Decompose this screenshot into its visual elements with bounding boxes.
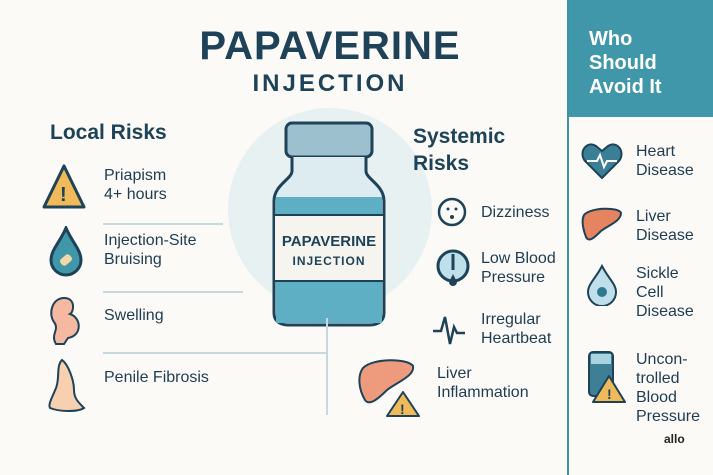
illustration: vial: INJECTION (292, 254, 366, 268)
item: irregular heartbeat: Irregular (481, 311, 541, 328)
item: bruising: Bruising (104, 251, 162, 268)
item: heart disease (582, 143, 694, 180)
item: priapism (42, 164, 167, 208)
item: penile fibrosis (48, 358, 209, 412)
illustration: vial: PAPAVERINE (282, 233, 376, 250)
item: priapism: Priapism (104, 167, 166, 184)
heading: systemic risks (413, 125, 505, 175)
item: low blood pressure: Low Blood (481, 250, 556, 267)
title (199, 24, 461, 97)
item: liver inflammation (358, 359, 529, 417)
item: uncontrolled bp: Uncon- (636, 351, 688, 368)
dividers (103, 223, 223, 225)
title: INJECTION (252, 70, 408, 97)
heading: systemic risks: Risks (413, 152, 469, 175)
panel: systemic risks (358, 125, 556, 417)
item: uncontrolled bp: trolled (636, 370, 680, 387)
item: bruising: Injection-Site (104, 232, 196, 249)
item: uncontrolled bp: Blood (636, 389, 677, 406)
item: swelling (50, 297, 164, 345)
item: liver inflammation: ! (400, 401, 405, 417)
item: heart disease: Disease (636, 162, 694, 179)
item: liver disease (582, 208, 694, 244)
item: bruising (50, 226, 196, 276)
item: dizziness (438, 198, 549, 226)
item: uncontrolled bp (588, 351, 700, 425)
item: sickle cell (587, 264, 694, 320)
illustration: vial (228, 108, 432, 326)
item: dizziness: Dizziness (481, 204, 549, 221)
item: irregular heartbeat: Heartbeat (481, 330, 551, 347)
panel: who should avoid (567, 0, 713, 475)
item: uncontrolled bp: Pressure (636, 408, 700, 425)
title: PAPAVERINE (199, 24, 461, 68)
item: liver disease: Liver (636, 208, 671, 225)
item: sickle cell: Cell (636, 284, 664, 301)
heading: who should avoid it: Avoid It (589, 76, 662, 98)
panel: local risks (42, 121, 209, 412)
heading: who should avoid it (569, 0, 713, 117)
item: liver inflammation: Inflammation (437, 384, 529, 401)
item: priapism: 4+ hours (104, 186, 167, 203)
item: sickle cell: Sickle (636, 265, 679, 282)
item: priapism: ! (60, 184, 67, 206)
item: liver disease: Disease (636, 227, 694, 244)
item: penile fibrosis: Penile Fibrosis (104, 369, 209, 386)
heading: who should avoid it: Who (589, 28, 632, 50)
heading: local risks: Local Risks (50, 121, 167, 144)
item: heart disease: Heart (636, 143, 675, 160)
item: low blood pressure (436, 250, 556, 286)
heading: systemic risks: Systemic (413, 125, 505, 148)
logo: allo (664, 432, 685, 446)
item: uncontrolled bp: ! (607, 386, 612, 402)
heading: who should avoid it: Should (589, 52, 657, 74)
item: swelling: Swelling (104, 307, 164, 324)
item: irregular heartbeat (433, 311, 552, 347)
item: sickle cell: Disease (636, 303, 694, 320)
item: liver inflammation: Liver (437, 365, 472, 382)
item: low blood pressure: Pressure (481, 269, 545, 286)
